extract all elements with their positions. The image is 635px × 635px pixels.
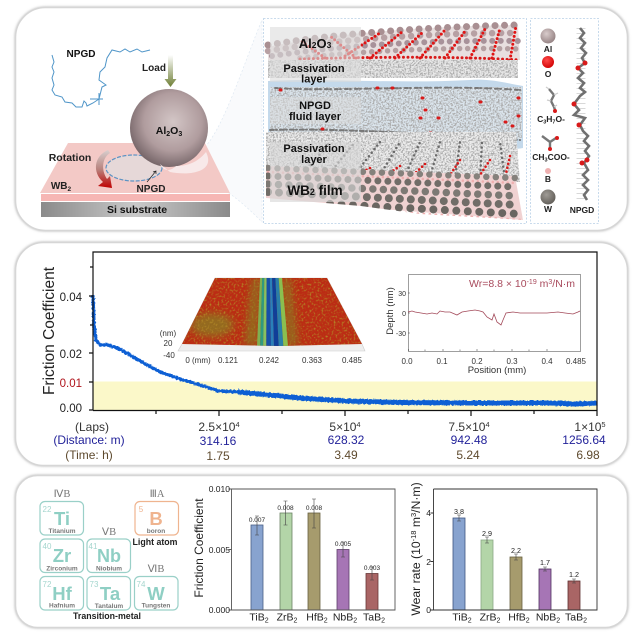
y tick labels bbox=[209, 484, 230, 615]
label: Load: Load bbox=[142, 63, 166, 74]
category labels: ZrB bbox=[277, 612, 294, 624]
label: Rotation: Rotation bbox=[49, 152, 91, 164]
x axis: time bbox=[65, 448, 600, 463]
bar chart: friction coefficient bbox=[192, 484, 395, 624]
molecule: NPGD vertical bbox=[570, 28, 594, 215]
x axis: time: 5.24 bbox=[456, 448, 480, 462]
3D axis labels: (nm) bbox=[160, 329, 177, 338]
icon: NPGD molecule chain bbox=[52, 49, 150, 107]
element: Hf: Hf bbox=[52, 583, 73, 604]
category labels: 2 bbox=[526, 618, 530, 624]
arrow: rotation bbox=[96, 150, 112, 188]
label: Transition-metal: Transition-metal bbox=[73, 611, 141, 621]
element: W: 74 bbox=[137, 580, 146, 589]
profile axes labels: -30 bbox=[396, 331, 406, 338]
bars bbox=[251, 513, 378, 610]
category labels bbox=[452, 612, 587, 624]
profile axes labels: 0.1 bbox=[436, 357, 448, 366]
value labels: 0.005 bbox=[335, 541, 352, 548]
atom: Al: Al bbox=[544, 44, 552, 54]
group labels: ⅤB bbox=[102, 527, 116, 538]
x axis: time: 6.98 bbox=[576, 448, 600, 462]
atom: W bbox=[540, 190, 556, 214]
bar chart: wear rate bbox=[409, 482, 597, 624]
label: NPGD fluid layer: fluid layer bbox=[289, 111, 342, 123]
element: W bbox=[134, 576, 178, 610]
upper passivation layer bbox=[268, 60, 518, 78]
y tick labels: 0.005 bbox=[209, 545, 230, 555]
value labels bbox=[454, 507, 579, 579]
group labels: ⅣB bbox=[54, 489, 70, 500]
molecule: C3H7O: 3 bbox=[543, 120, 546, 126]
group labels bbox=[54, 489, 165, 575]
value labels: 3.8 bbox=[454, 507, 464, 516]
WB2 film atoms bbox=[266, 166, 523, 220]
value labels: 0.008 bbox=[277, 505, 294, 512]
Al2O3 ball: 2 bbox=[166, 131, 170, 138]
label: WB2: WB bbox=[51, 181, 68, 192]
Al2O3 ball: O bbox=[170, 125, 178, 137]
label: lower passivation layer: layer bbox=[301, 154, 328, 166]
lower passivation layer bbox=[266, 132, 524, 220]
category labels: 2 bbox=[468, 618, 472, 624]
element: Hf: 72 bbox=[43, 580, 52, 589]
category labels: HfB bbox=[306, 612, 324, 624]
profile axes labels: 0.485 bbox=[566, 357, 587, 366]
category labels: 2 bbox=[294, 618, 298, 624]
category labels: 2 bbox=[583, 618, 587, 624]
value labels bbox=[249, 505, 381, 572]
3D wear track inset bbox=[160, 276, 365, 365]
panel: element table and bar charts bbox=[16, 476, 628, 628]
profile annotation: /N·m bbox=[552, 278, 575, 290]
label: NPGD contact bbox=[137, 171, 165, 195]
profile axes labels: 0.0 bbox=[401, 357, 413, 366]
axis title: m bbox=[409, 517, 423, 531]
profile annotation: 3 bbox=[548, 279, 552, 286]
x axis: laps: 2.5×10 bbox=[198, 420, 235, 434]
x axis: laps: 4 bbox=[356, 420, 361, 429]
element: Ti: Ti bbox=[54, 508, 70, 529]
profile axes labels bbox=[385, 287, 587, 376]
value labels: 0.007 bbox=[249, 517, 266, 524]
category labels: TiB bbox=[249, 612, 265, 624]
x axis: laps: 4 bbox=[485, 420, 490, 429]
Al2O3 ball bbox=[130, 89, 208, 167]
error bars bbox=[457, 515, 576, 583]
value labels: 2.2 bbox=[511, 546, 521, 555]
plot frame and ticks bbox=[89, 252, 597, 416]
molecule: C3H7O: H bbox=[546, 114, 552, 124]
panel: friction coefficient curve bbox=[16, 242, 628, 466]
3D axis labels: 0.242 bbox=[259, 356, 280, 365]
element: Nb: Nb bbox=[97, 546, 121, 566]
value labels: 2.9 bbox=[482, 529, 492, 538]
zoom cone linking contact to simulation bbox=[170, 20, 262, 222]
axes bbox=[430, 489, 597, 610]
label: upper passivation layer: layer bbox=[301, 74, 328, 86]
friction curve bbox=[93, 295, 597, 404]
value labels: 1.2 bbox=[569, 570, 579, 579]
element: W: W bbox=[147, 583, 165, 604]
x axis: distance: (Distance: m) bbox=[53, 433, 125, 447]
molecule: C3H7O: O- bbox=[555, 114, 565, 124]
atom: O bbox=[542, 56, 554, 79]
x axis: laps: 1×10 bbox=[574, 420, 601, 434]
element: W: Tungsten bbox=[142, 602, 170, 610]
y axis tick labels bbox=[60, 292, 83, 415]
category labels: 2 bbox=[497, 618, 501, 624]
y axis tick labels: 0.02 bbox=[60, 349, 82, 361]
label: Al2O3: Al2O3 bbox=[299, 36, 332, 51]
atom: B bbox=[545, 168, 551, 184]
category labels: 2 bbox=[265, 618, 269, 624]
element: Nb: Niobium bbox=[96, 566, 122, 572]
element: Ti: Titanium bbox=[49, 528, 76, 535]
label: WB2 film: WB2 film bbox=[287, 183, 343, 198]
3D axis labels: 20 bbox=[164, 339, 173, 348]
label: NPGD: NPGD bbox=[67, 49, 95, 60]
axis title: /N·m) bbox=[409, 482, 423, 513]
element: B: B bbox=[149, 508, 163, 529]
label: Light atom: Light atom bbox=[133, 537, 178, 547]
molecule: C3H7O bbox=[537, 87, 565, 126]
element: Ti: 22 bbox=[43, 505, 52, 514]
y tick labels: 4 bbox=[426, 508, 431, 518]
element: Hf: Hafnium bbox=[49, 602, 75, 610]
y axis title: Friction Coefficient bbox=[41, 266, 58, 395]
Al2O3 ball: 3 bbox=[178, 131, 182, 138]
category labels bbox=[249, 612, 385, 624]
element: Nb bbox=[87, 539, 130, 572]
periodic table excerpt bbox=[40, 489, 178, 621]
element: Nb: 41 bbox=[89, 542, 98, 551]
element: B: boron bbox=[147, 528, 165, 535]
y axis tick labels: 0.00 bbox=[60, 403, 82, 415]
WB2 film top surface bbox=[40, 143, 230, 193]
y tick labels bbox=[426, 508, 431, 615]
molecule: C3H7O: 7 bbox=[552, 120, 555, 126]
3D axis labels: -40 bbox=[163, 351, 175, 360]
molecule: CH3COO: 3 bbox=[545, 158, 548, 164]
3D axis labels: 0.121 bbox=[218, 356, 239, 365]
x axis: laps: 5 bbox=[601, 420, 606, 429]
bars bbox=[453, 518, 580, 610]
element: Hf bbox=[40, 576, 84, 610]
label: NPGD contact: NPGD bbox=[137, 184, 165, 195]
element: Zr: 40 bbox=[43, 542, 52, 551]
molecule: C3H7O: C bbox=[537, 114, 543, 124]
x axis: laps: 5×10 bbox=[329, 420, 356, 434]
element: Ta: 73 bbox=[90, 580, 99, 589]
x axis: time: 3.49 bbox=[334, 448, 358, 462]
contact zone bbox=[160, 152, 208, 173]
element: Ti bbox=[40, 502, 84, 535]
Si substrate bbox=[41, 202, 230, 217]
x axis: distance: 314.16 bbox=[200, 434, 237, 448]
y axis tick labels: 0.04 bbox=[60, 292, 83, 304]
atomic simulation bbox=[266, 25, 524, 220]
y tick labels: 0 bbox=[426, 605, 431, 615]
x axis: distance: 942.48 bbox=[451, 433, 488, 447]
element: Ta: Ta bbox=[100, 583, 121, 604]
element: Ta: Tantalum bbox=[95, 603, 123, 610]
fluid molecules bbox=[270, 87, 522, 139]
element: B: 5 bbox=[139, 505, 144, 514]
profile axes labels: 0.3 bbox=[506, 357, 518, 366]
category labels: 2 bbox=[556, 618, 560, 624]
arrow: load bbox=[164, 55, 176, 87]
atom: Al bbox=[540, 28, 556, 54]
3D axis labels bbox=[160, 329, 363, 365]
atom: B: B bbox=[545, 174, 551, 184]
label: lower passivation layer: Passivation bbox=[283, 143, 345, 155]
group labels: ⅥB bbox=[148, 564, 164, 575]
profile axes labels: 30 bbox=[398, 291, 406, 298]
element: Zr bbox=[40, 539, 84, 572]
profile axes labels: 0.4 bbox=[541, 357, 553, 366]
simulation box frame bbox=[264, 18, 526, 224]
x axis: laps bbox=[75, 420, 606, 434]
profile annotation: -19 bbox=[527, 279, 537, 286]
wear track bbox=[106, 155, 162, 181]
category labels: HfB bbox=[508, 612, 526, 624]
x axis: distance: 628.32 bbox=[328, 433, 365, 447]
profile annotation: Wr=8.8 × 10 bbox=[469, 278, 527, 290]
axis title: 3 bbox=[409, 513, 418, 517]
x axis: distance bbox=[53, 433, 606, 448]
molecule: NPGD vertical: NPGD bbox=[570, 205, 594, 215]
Al2O3 atoms bbox=[268, 25, 520, 60]
x axis: time: 1.75 bbox=[206, 449, 230, 463]
category labels: TiB bbox=[452, 612, 468, 624]
molecule: CH3COO: COO- bbox=[548, 152, 570, 162]
y axis tick labels: 0.01 bbox=[60, 378, 82, 390]
value labels: 0.003 bbox=[364, 565, 381, 572]
profile axes labels: Depth (nm) bbox=[385, 287, 396, 335]
y tick labels: 2 bbox=[426, 557, 431, 567]
label: upper passivation layer: Passivation bbox=[283, 63, 345, 75]
y tick labels: 0.000 bbox=[209, 605, 230, 615]
3D axis labels: 0.363 bbox=[302, 356, 323, 365]
category labels: 2 bbox=[324, 618, 328, 624]
value labels: 1.7 bbox=[540, 558, 550, 567]
axis title: Wear rate (10 bbox=[409, 541, 423, 616]
label panel overlays bbox=[270, 27, 361, 82]
category labels: TaB bbox=[565, 612, 583, 624]
low friction band bbox=[93, 382, 597, 410]
label: WB2: 2 bbox=[68, 186, 72, 193]
3D axis labels: 0 (mm) bbox=[185, 356, 211, 365]
group labels: ⅢA bbox=[150, 489, 165, 500]
profile annotation: m bbox=[537, 278, 549, 290]
Si substrate: Si substrate bbox=[107, 204, 167, 216]
x axis: laps: 4 bbox=[235, 420, 240, 429]
element: Ta bbox=[87, 576, 130, 610]
x axis: time: (Time: h) bbox=[65, 448, 113, 462]
category labels: ZrB bbox=[480, 612, 497, 624]
profile axes labels: 0 bbox=[402, 311, 406, 318]
profile axes labels: 0.2 bbox=[471, 357, 483, 366]
x axis: laps: (Laps) bbox=[75, 420, 109, 434]
atom: O: O bbox=[545, 69, 552, 79]
label: NPGD fluid layer: NPGD bbox=[299, 100, 331, 112]
x axis: laps: 7.5×10 bbox=[448, 420, 485, 434]
category labels: NbB bbox=[333, 612, 353, 624]
category labels: NbB bbox=[536, 612, 556, 624]
Al2O3 ball: Al bbox=[156, 125, 166, 137]
x axis: distance: 1256.64 bbox=[562, 433, 606, 447]
panel: tribological test schematic and molecular simulation bbox=[16, 8, 628, 230]
element: B bbox=[135, 502, 178, 535]
WB2 film front edge bbox=[41, 194, 230, 201]
axes bbox=[228, 489, 395, 610]
legend box bbox=[530, 18, 598, 224]
axis title: -18 bbox=[409, 531, 418, 541]
molecule: CH3COO bbox=[532, 136, 570, 164]
depth profile inset bbox=[385, 274, 587, 376]
fluid layer background bbox=[268, 80, 523, 149]
value labels: 0.008 bbox=[306, 505, 323, 512]
y tick labels: 0.010 bbox=[209, 484, 230, 494]
error bars bbox=[255, 499, 374, 580]
molecule: CH3COO: CH bbox=[532, 152, 545, 162]
category labels: 2 bbox=[381, 618, 385, 624]
category labels: 2 bbox=[353, 618, 357, 624]
axis title: Friction Coefficient bbox=[192, 498, 206, 598]
element: Zr: Zr bbox=[53, 545, 71, 566]
category labels: TaB bbox=[363, 612, 381, 624]
profile axes labels: Position (mm) bbox=[468, 365, 526, 376]
3D axis labels: 0.485 bbox=[342, 356, 363, 365]
element: Zr: Zirconium bbox=[46, 566, 78, 572]
atom: W: W bbox=[544, 204, 553, 214]
